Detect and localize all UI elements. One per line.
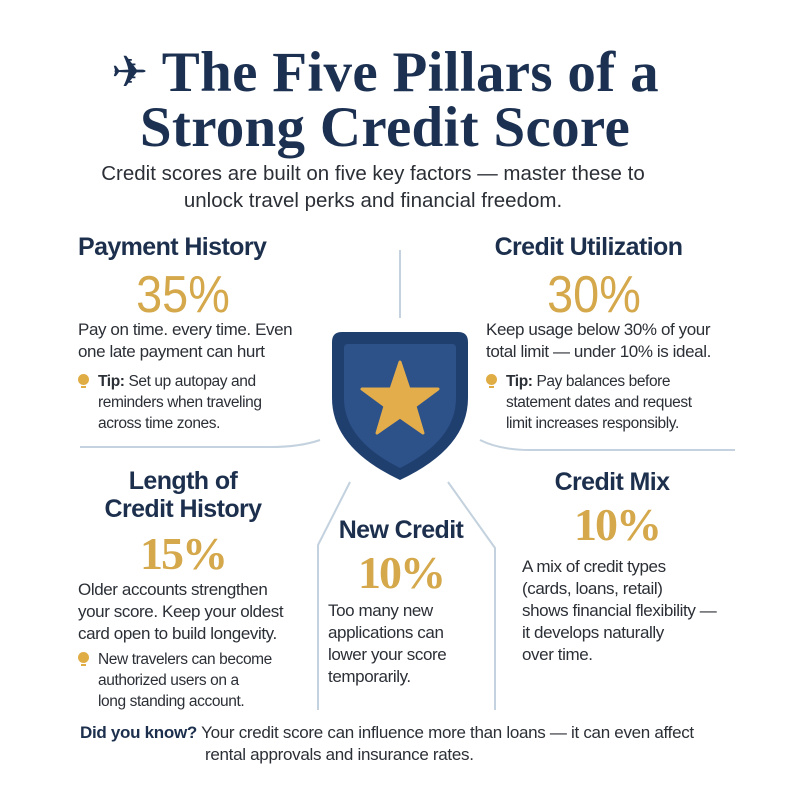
tip: Tip: Pay balances before [506,373,670,390]
tip [486,373,692,432]
title: ✈ The Five Pillars of a [111,41,659,104]
footer: did you know: rental approvals and insurance rates. [205,745,474,764]
percentage: 10% [358,547,444,598]
panel: length of credit history [78,467,284,710]
subtitle: Credit scores are built on five key factors — master these to [101,162,645,185]
tip: authorized users on a [98,672,239,689]
text: it develops naturally [522,623,664,642]
heading: Credit History [105,495,261,523]
text [78,580,284,643]
text: Too many new [328,601,433,620]
tip: across time zones. [98,415,220,432]
text [522,557,717,664]
heading: Credit Mix [555,468,669,496]
text: card open to build longevity. [78,624,277,643]
heading [105,467,262,523]
panel: credit utilization [486,233,711,432]
subtitle: unlock travel perks and financial freedom. [184,189,562,212]
heading: Payment History [78,233,266,261]
percentage: 30% [547,266,641,324]
tip: New travelers can become [98,651,272,668]
text: applications can [328,623,444,642]
footer: did you know [80,723,694,764]
text: lower your score [328,645,446,664]
footer: did you know: Did you know? Your credit score can influence more than loans — it can even affect [80,723,694,742]
percentage: 15% [140,528,226,579]
text [486,320,711,361]
title [111,41,659,159]
text: Older accounts strengthen [78,580,267,599]
panel: new credit [328,516,464,686]
percentage: 35% [136,266,230,324]
tip: limit increases responsibly. [506,415,679,432]
icon: shield with star [332,332,468,480]
heading: Length of [129,467,237,495]
tip: Tip: Set up autopay and [98,373,256,390]
text [328,601,446,686]
tip [78,651,272,710]
percentage: 10% [574,499,660,550]
text: Keep usage below 30% of your [486,320,710,339]
text: Pay on time. every time. Even [78,320,292,339]
text: your score. Keep your oldest [78,602,283,621]
panel: payment history [78,233,292,432]
text: temporarily. [328,667,411,686]
text: A mix of credit types [522,557,666,576]
tip [78,373,262,432]
text: (cards, loans, retail) [522,579,662,598]
text: shows financial flexibility — [522,601,716,620]
text: one late payment can hurt [78,342,265,361]
tip: statement dates and request [506,394,692,411]
text [78,320,292,361]
text: over time. [522,645,593,664]
panel: credit mix [522,468,717,664]
heading: New Credit [339,516,463,544]
tip: reminders when traveling [98,394,262,411]
subtitle [101,162,645,212]
heading: Credit Utilization [495,233,682,261]
title: Strong Credit Score [140,96,630,159]
text: total limit — under 10% is ideal. [486,342,711,361]
tip: long standing account. [98,693,244,710]
